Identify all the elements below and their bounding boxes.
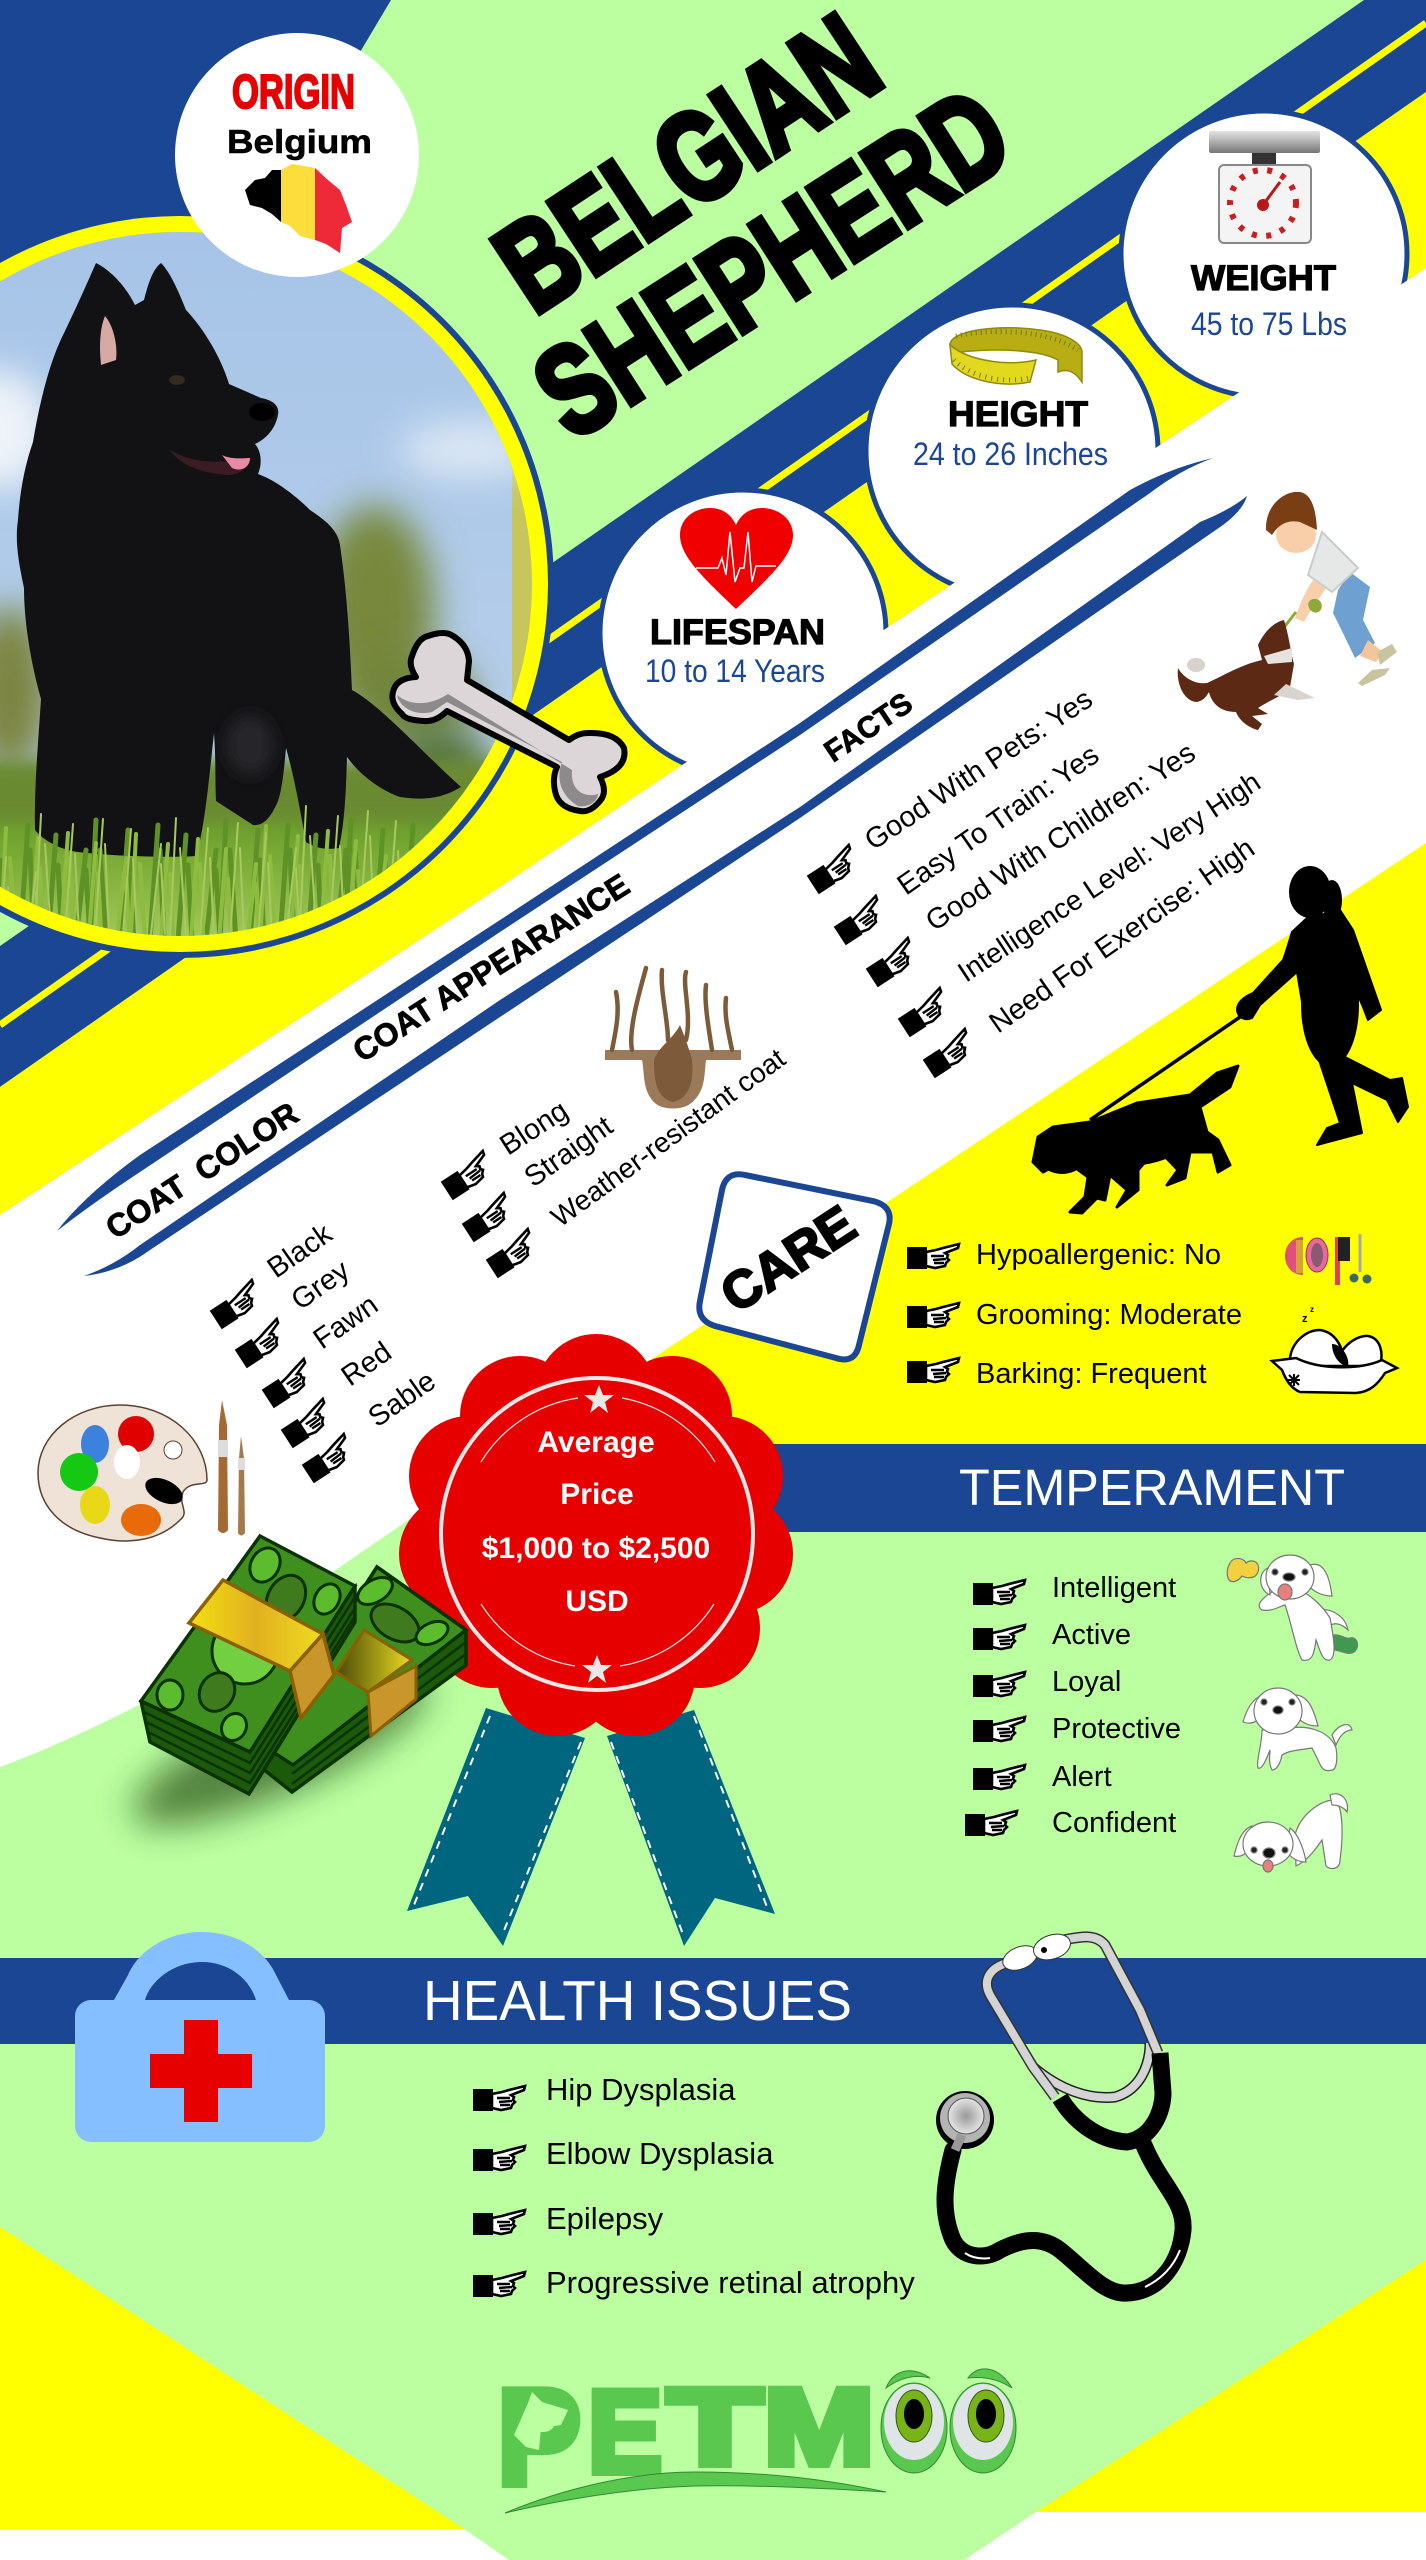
appearance: straight: [460, 1110, 619, 1242]
height value: 24 to 26 Inches: [913, 436, 1108, 472]
temperament: confident: Confident: [1052, 1807, 1176, 1839]
appearance: blong: [439, 1095, 574, 1200]
icon: playful white dog with toys: [1227, 1555, 1357, 1660]
list: coat appearance: [439, 1042, 791, 1278]
temperament: active: [973, 1619, 1131, 1651]
heading: temperament: TEMPERAMENT: [959, 1459, 1345, 1516]
origin country: Belgium: [227, 123, 372, 160]
icon: kitchen scale: [1209, 131, 1320, 243]
appearance: straight: Straight: [519, 1110, 619, 1194]
bubble: weight circle: [1121, 111, 1407, 397]
logo eyes: [881, 2369, 1016, 2473]
header ribbon: upper blue stripe: [57, 458, 1213, 1231]
lifespan value: 10 to 14 Years: [645, 653, 825, 689]
height label: HEIGHT: [948, 395, 1088, 434]
health: epilepsy: Epilepsy: [546, 2201, 664, 2236]
background: bottom-right yellow corner: [1036, 2260, 1426, 2512]
bubble: lifespan circle: [600, 490, 886, 776]
photo: black Belgian Shepherd in circular frame: [0, 210, 554, 962]
price text: USD: [565, 1585, 629, 1618]
list: care: [907, 1239, 1242, 1390]
temperament: loyal: [973, 1666, 1121, 1698]
weight block: [1191, 131, 1347, 342]
heading: facts: FACTS: [819, 687, 919, 769]
bubble: height circle: [866, 305, 1158, 597]
background: bottom-left white corner: [0, 2529, 509, 2560]
background: thin yellow stripe: [0, 23, 1426, 1025]
logo wordmark: M: [764, 2366, 874, 2487]
ribbon: right tail: [607, 1710, 775, 1946]
heading: coat color: COAT COLOR: [99, 1095, 305, 1246]
care heading: CARE: [711, 1195, 866, 1324]
temperament: active: Active: [1052, 1619, 1131, 1651]
logo underline swoosh: [505, 2472, 886, 2513]
weight value: 45 to 75 Lbs: [1191, 306, 1347, 342]
fact: intelligence level: Intelligence Level: Very High: [952, 765, 1266, 988]
fact: easy to train: Easy To Train: Yes: [892, 739, 1105, 902]
fact: need for exercise: Need For Exercise: High: [984, 832, 1261, 1040]
color: fawn: [260, 1289, 384, 1408]
money shadow: [117, 1647, 443, 1853]
icon: bone: [392, 633, 624, 811]
weight label: WEIGHT: [1191, 259, 1336, 298]
color: red: [279, 1336, 398, 1448]
price text: Price: [560, 1478, 634, 1511]
color: sable: [300, 1365, 442, 1483]
appearance: weather-resistant coat: Weather-resistant coat: [545, 1042, 791, 1233]
list: health issues: [473, 2072, 915, 2300]
background: bottom-right white corner: [964, 2512, 1426, 2560]
temperament: alert: [973, 1761, 1112, 1793]
care: hypoallergenic: Hypoallergenic: No: [976, 1239, 1221, 1271]
fact: good with children: Good With Children: Yes: [920, 737, 1201, 938]
color: sable: Sable: [363, 1365, 442, 1434]
color: black: [208, 1218, 339, 1329]
icon: woman walking dog silhouette: [1033, 866, 1408, 1213]
care: grooming: Grooming: Moderate: [976, 1299, 1242, 1331]
icon: Belgium map flag: [245, 164, 352, 253]
color: fawn: Fawn: [308, 1289, 384, 1356]
background: white diagonal panel: [0, 268, 1426, 1767]
fact: easy to train: [832, 739, 1105, 945]
price text: Average: [537, 1426, 655, 1459]
icon: grooming tools: [1285, 1234, 1372, 1285]
care: barking: Barking: Frequent: [976, 1358, 1207, 1390]
origin badge: [175, 33, 419, 277]
icon: stacks of money: [141, 1536, 466, 1794]
appearance: weather-resistant coat: [484, 1042, 791, 1278]
temperament: protective: [973, 1713, 1181, 1745]
icon: sleeping dog in basket: z: [1302, 1313, 1308, 1325]
fact: good with pets: Good With Pets: Yes: [859, 683, 1098, 857]
fact: good with children: [864, 737, 1201, 987]
temperament: alert: Alert: [1052, 1761, 1112, 1793]
price badge: [399, 1334, 793, 1736]
temperament: intelligent: [973, 1572, 1176, 1605]
color: black: Black: [262, 1218, 339, 1285]
background: top-left blue corner: [0, 0, 391, 420]
heading: coat appearance: COAT APPEARANCE: [346, 867, 636, 1069]
band: temperament heading bar: [650, 1444, 1426, 1532]
temperament: confident: [965, 1807, 1176, 1839]
background: care yellow panel: [523, 843, 1426, 1445]
list: facts: [805, 683, 1266, 1078]
heading: health issues: HEALTH ISSUES: [423, 1969, 852, 2033]
temperament: intelligent: Intelligent: [1052, 1572, 1176, 1604]
icon: crouching white dog: [1234, 1794, 1348, 1872]
icon: measuring tape: [950, 328, 1082, 384]
fact: good with pets: [805, 683, 1098, 894]
list: coat color: [208, 1218, 442, 1483]
care badge: [699, 1174, 890, 1359]
lifespan label: LIFESPAN: [650, 613, 825, 652]
health: epilepsy: [473, 2201, 664, 2236]
background: diagonal yellow band: [0, 92, 1426, 1215]
ribbon: left tail: [407, 1708, 585, 1946]
icon: hair follicle: [605, 968, 741, 1108]
list: temperament: [965, 1572, 1181, 1839]
color: grey: Grey: [286, 1254, 356, 1317]
logo wordmark: [497, 2361, 874, 2513]
height block: [913, 328, 1108, 472]
logo dog head cutout in P: [514, 2392, 568, 2450]
scalloped rosette: [399, 1334, 793, 1736]
logo wordmark: P: [497, 2361, 581, 2513]
band: health issues heading bar: [0, 1958, 1426, 2044]
health: elbow dysplasia: Elbow Dysplasia: [546, 2136, 774, 2171]
temperament: loyal: Loyal: [1052, 1666, 1121, 1698]
color: grey: [233, 1254, 356, 1368]
icon: sleeping dog in basket: [1272, 1305, 1397, 1393]
icon: stethoscope: [936, 1930, 1183, 2293]
fact: need for exercise: [921, 832, 1261, 1078]
icon: boy playing tug with dog: [1178, 492, 1397, 730]
origin heading: ORIGIN: [232, 66, 355, 119]
price text: [482, 1426, 710, 1618]
logo: PetMoo: [497, 2361, 1016, 2513]
icon: sleeping dog in basket: z: [1310, 1305, 1314, 1314]
fact: intelligence level: [896, 765, 1266, 1037]
icon: paint palette and brushes: [38, 1400, 245, 1541]
header ribbon: lower blue stripe: [84, 496, 1247, 1276]
health: progressive retinal atrophy: Progressive retinal atrophy: [546, 2265, 915, 2300]
color: red: Red: [336, 1336, 398, 1393]
logo wordmark: T: [668, 2366, 762, 2487]
logo wordmark: E: [588, 2366, 662, 2497]
health: hip dysplasia: [473, 2072, 736, 2111]
price text: $1,000 to $2,500: [482, 1532, 710, 1565]
icon: heart with heartbeat: [680, 508, 793, 609]
health: hip dysplasia: Hip Dysplasia: [546, 2072, 736, 2107]
temperament: protective: Protective: [1052, 1713, 1181, 1745]
icon: medical bag: [75, 1932, 325, 2142]
background: bottom-left yellow corner: [0, 2227, 464, 2529]
background: diagonal blue band: [0, 0, 1426, 1087]
icon: standing white dog: [1243, 1688, 1352, 1771]
appearance: blong: Blong: [494, 1095, 574, 1162]
lifespan block: [645, 508, 825, 689]
